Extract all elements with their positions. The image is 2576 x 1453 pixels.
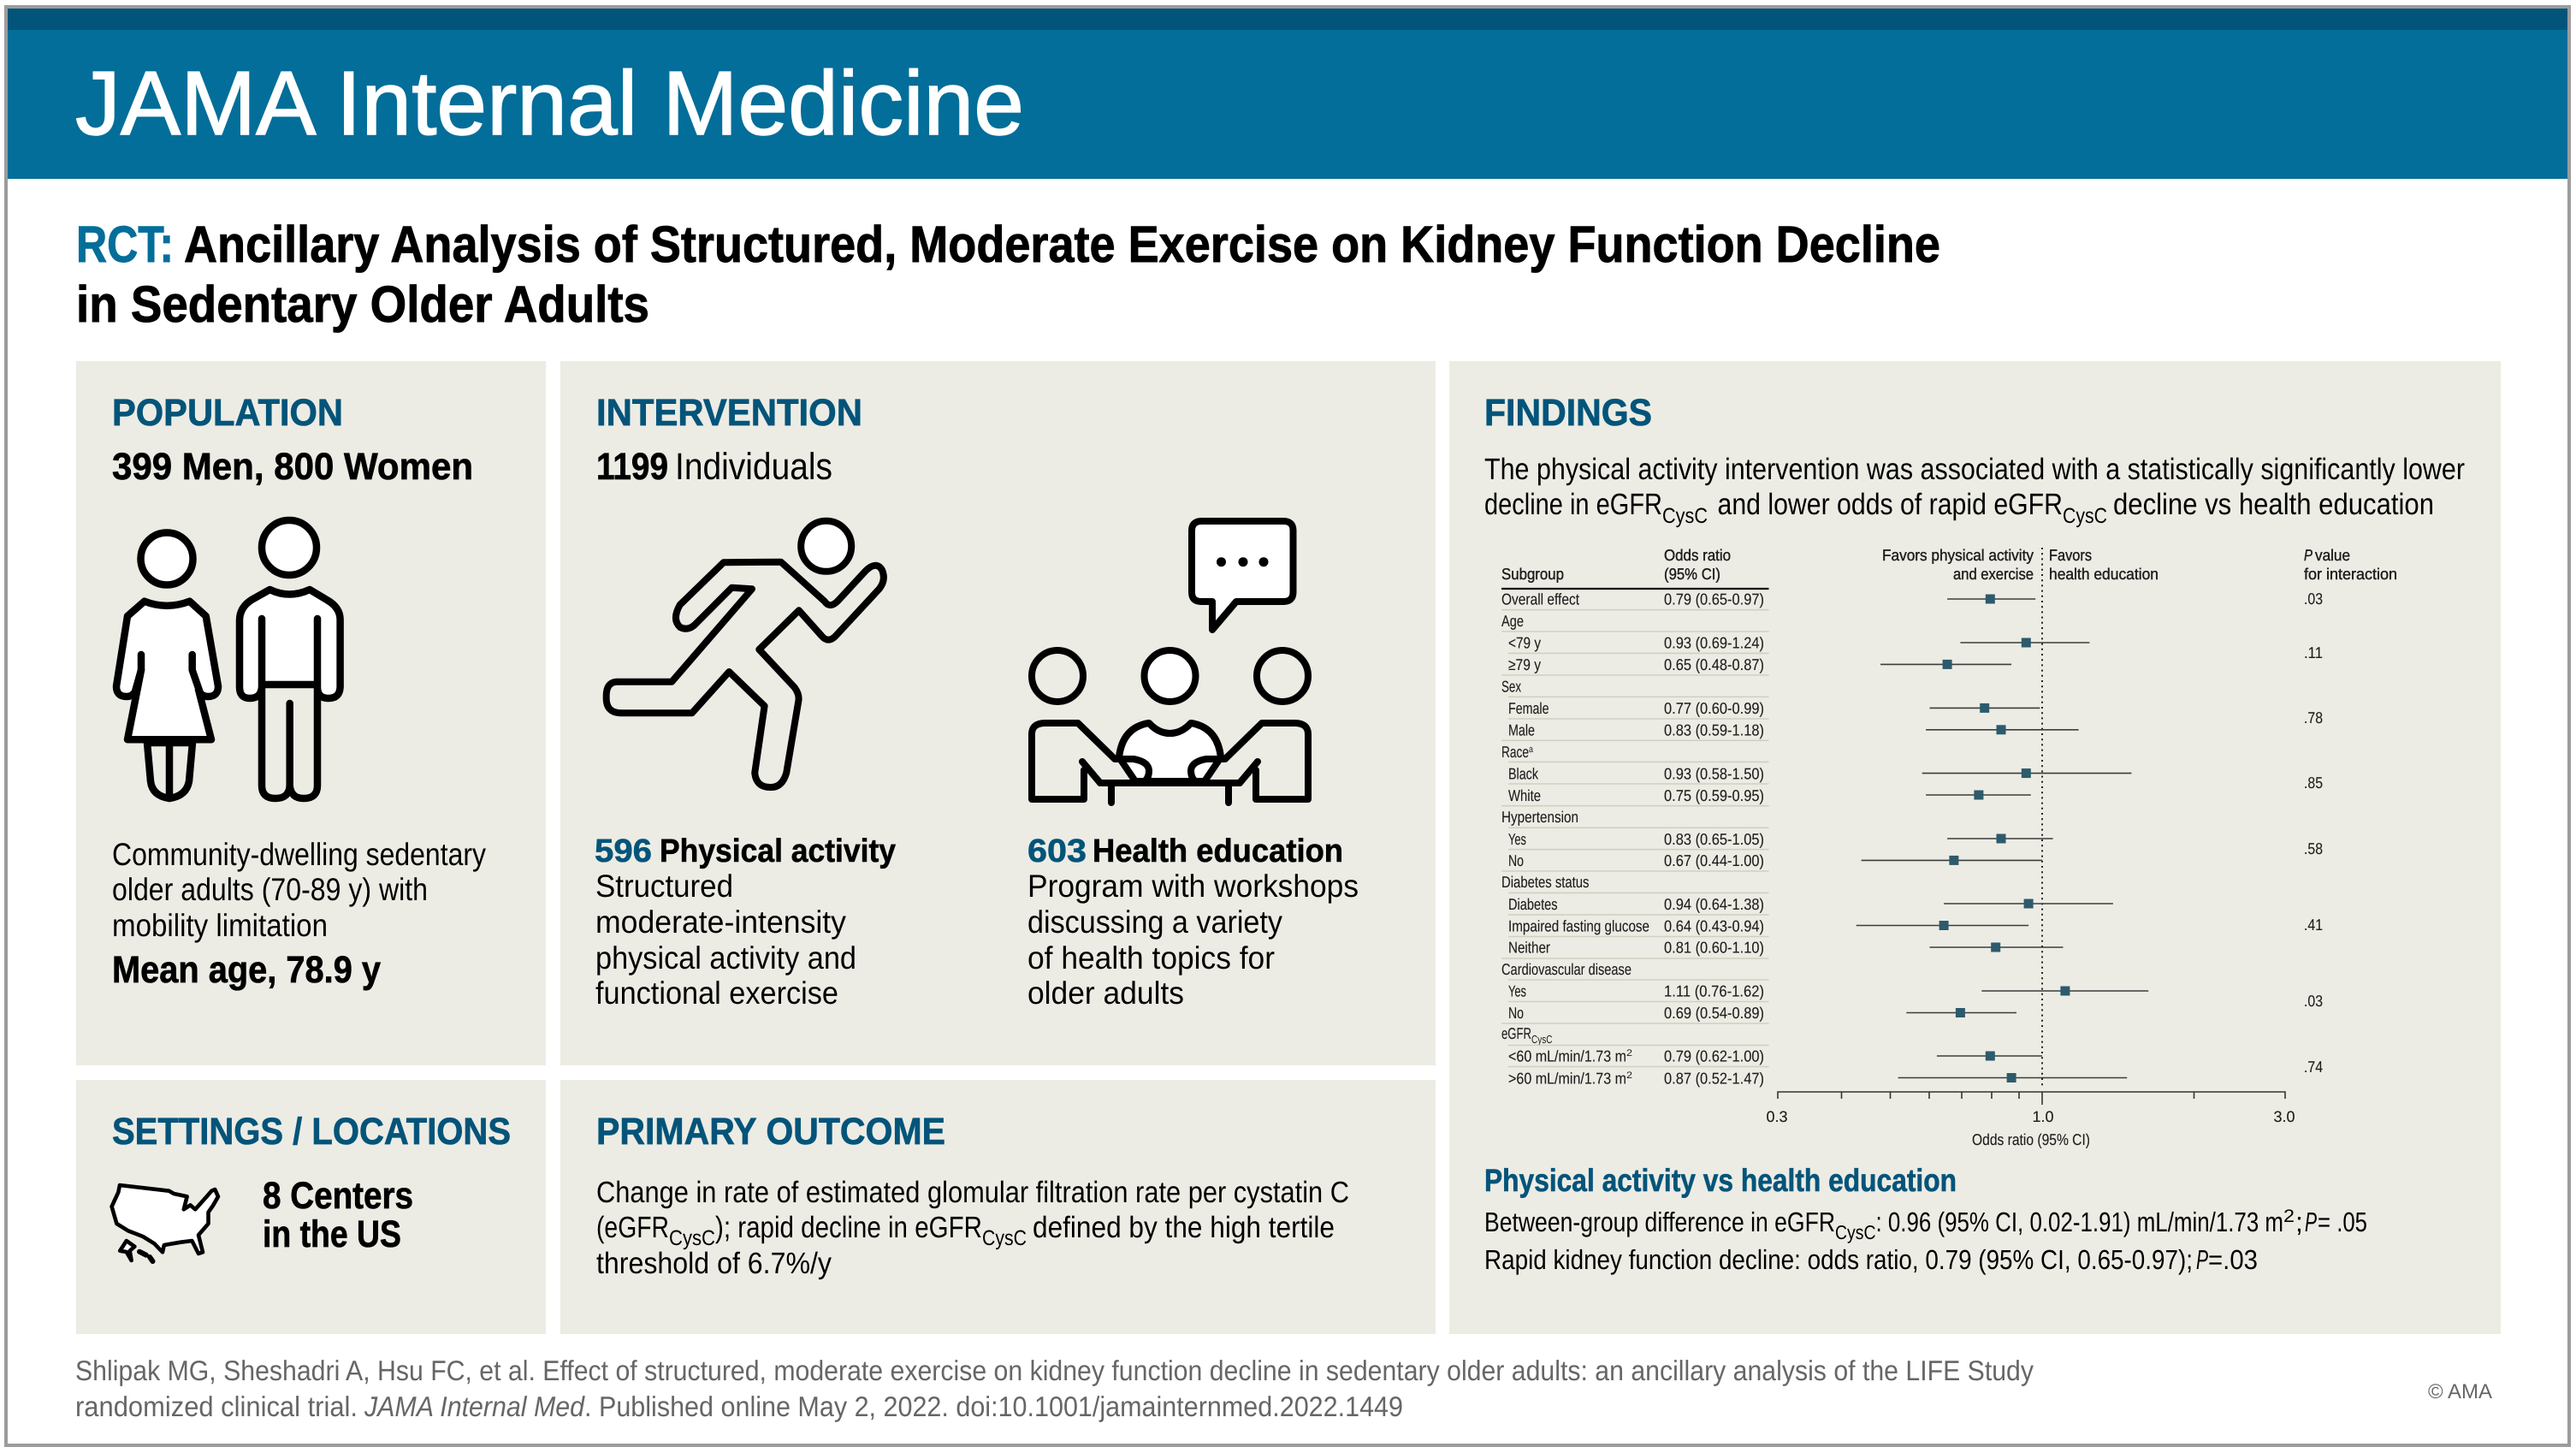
x axis: odds ratio: 0.3: [1766, 1108, 1788, 1125]
population description: older adults (70-89 y) with: [112, 872, 428, 907]
citation: JAMA Internal Med: [364, 1391, 586, 1422]
icon: speech bubble: [1192, 521, 1294, 630]
health education arm: [1027, 833, 1359, 1011]
copyright: © AMA: [2428, 1380, 2492, 1403]
group: age: <79 y: [1508, 633, 1542, 652]
journal title: JAMA Internal Medicine: [75, 53, 1024, 154]
group: diabetes status: 0.94 (0.64-1.38): [1664, 895, 1764, 913]
null reference line: [2041, 548, 2043, 1088]
result: between-group difference: 2: [2283, 1207, 2295, 1226]
forest plot column headers: health education: [2049, 565, 2159, 583]
group: diabetes status: Neither: [1508, 938, 1550, 957]
forest plot column headers: and exercise: [1953, 565, 2034, 583]
result: between-group difference: P: [2305, 1207, 2317, 1237]
icon: woman and man: [116, 520, 341, 798]
total individuals: [596, 446, 832, 488]
heading: intervention: INTERVENTION: [596, 392, 862, 434]
group: cardiovascular disease: [1501, 960, 2148, 1023]
result: between-group difference: [1484, 1207, 2367, 1243]
P values for interaction: .03: [2304, 992, 2323, 1010]
group: sex: [1501, 678, 2079, 740]
group: hypertension: [1501, 808, 2053, 871]
physical activity arm: Structured: [595, 869, 733, 904]
group: baseline eGFR: 2: [1626, 1070, 1632, 1081]
group: cardiovascular disease: 1.11 (0.76-1.62): [1664, 982, 1764, 999]
group: sex: 0.77 (0.60-0.99): [1664, 699, 1764, 717]
header banner: [8, 9, 2567, 179]
icon: group discussion at table: [1032, 650, 1308, 803]
findings summary: and lower odds of rapid eGFR: [1718, 488, 2063, 521]
x axis: odds ratio: Odds ratio (95% CI): [1972, 1130, 2090, 1148]
group: sex: Sex: [1501, 678, 1522, 695]
group: cardiovascular disease: Yes: [1508, 982, 1526, 999]
group: diabetes status: [1501, 873, 2113, 958]
citation: [75, 1355, 2034, 1422]
group: cardiovascular disease: 0.69 (0.54-0.89): [1664, 1004, 1764, 1022]
heading: settings: SETTINGS / LOCATIONS: [112, 1111, 511, 1153]
outcome description: [596, 1176, 1349, 1280]
total individuals: 1199: [596, 446, 668, 488]
panel: settings and locations: [76, 1080, 546, 1334]
group: diabetes status: 0.81 (0.60-1.10): [1664, 938, 1764, 957]
panel: intervention: [560, 361, 1436, 1065]
forest plot column headers: (95% CI): [1664, 565, 1720, 583]
health education arm: of health topics for: [1027, 940, 1275, 976]
forest plot column headers: [1501, 546, 2397, 589]
group: age: 0.65 (0.48-0.87): [1664, 655, 1764, 673]
centers count: 8 Centers: [263, 1175, 413, 1217]
group: sex: 0.83 (0.59-1.18): [1664, 721, 1764, 739]
physical activity arm: 596: [595, 833, 652, 869]
total individuals: Individuals: [675, 446, 832, 488]
outcome description: CysC: [669, 1226, 715, 1250]
group: hypertension: No: [1508, 851, 1524, 869]
forest plot column headers: Favors: [2049, 546, 2092, 564]
citation: randomized clinical trial.: [75, 1391, 358, 1422]
row: overall effect: [1501, 590, 2035, 610]
P values for interaction: .03: [2304, 590, 2323, 608]
result: rapid kidney function decline: Rapid kidney function decline: odds ratio, 0.79 (95% CI, 0.65-0.97);: [1484, 1244, 2193, 1275]
forest plot column headers: for interaction: [2304, 565, 2397, 583]
headline: [76, 216, 1940, 333]
health education arm: 603: [1027, 833, 1087, 869]
subheading: physical activity vs health education: Physical activity vs health education: [1484, 1163, 1957, 1198]
result: between-group difference: : 0.96 (95% CI, 0.02-1.91) mL/min/1.73 m: [1875, 1207, 2283, 1237]
findings summary: CysC: [1662, 504, 1708, 528]
headline: in Sedentary Older Adults: [76, 276, 649, 333]
mean age: Mean age, 78.9 y: [112, 949, 381, 991]
population description: mobility limitation: [112, 908, 328, 943]
group: hypertension: 0.83 (0.65-1.05): [1664, 830, 1764, 848]
group: diabetes status: Diabetes status: [1501, 873, 1590, 891]
group: baseline eGFR: [1501, 1024, 2127, 1087]
heading: primary outcome: PRIMARY OUTCOME: [596, 1111, 945, 1153]
physical activity arm: [595, 833, 896, 1011]
forest plot column headers: P: [2304, 546, 2313, 564]
forest plot column headers: value: [2315, 546, 2350, 564]
outcome description: defined by the high tertile: [1033, 1211, 1335, 1244]
health education arm: discussing a variety: [1027, 904, 1282, 940]
findings summary: decline in eGFR: [1484, 488, 1662, 521]
group: baseline eGFR: CysC: [1531, 1033, 1552, 1046]
population counts: 399 Men, 800 Women: [112, 446, 473, 488]
group: age: [1501, 612, 2089, 675]
group: cardiovascular disease: Cardiovascular disease: [1501, 960, 1631, 978]
P values for interaction: .78: [2304, 709, 2323, 726]
group: race: 0.93 (0.58-1.50): [1664, 765, 1764, 782]
icon: US map: [112, 1185, 218, 1261]
group: sex: Female: [1508, 699, 1549, 717]
result: between-group difference: = .05: [2318, 1207, 2367, 1237]
panel: primary outcome: [560, 1080, 1436, 1334]
headline: Ancillary Analysis of Structured, Moderate Exercise on Kidney Function Decline: [184, 216, 1940, 273]
P values for interaction: .41: [2304, 916, 2323, 934]
group: race: a: [1529, 744, 1534, 755]
population description: [112, 837, 486, 943]
physical activity arm: functional exercise: [595, 976, 838, 1011]
outcome description: threshold of 6.7%/y: [596, 1247, 832, 1280]
P values for interaction: .58: [2304, 839, 2323, 857]
icon: runner: [607, 521, 884, 787]
headline: RCT:: [76, 216, 174, 273]
result: between-group difference: ;: [2295, 1207, 2303, 1237]
group: diabetes status: Diabetes: [1508, 895, 1557, 913]
panel: findings: [1449, 361, 2501, 1334]
outcome description: (eGFR: [596, 1211, 669, 1244]
group: diabetes status: 0.64 (0.43-0.94): [1664, 917, 1764, 934]
citation: . Published online May 2, 2022. doi:10.1001/jamainternmed.2022.1449: [584, 1391, 1403, 1422]
group: cardiovascular disease: No: [1508, 1004, 1524, 1022]
x axis: odds ratio: 1.0: [2032, 1108, 2054, 1125]
result: rapid kidney function decline: P: [2196, 1244, 2208, 1275]
physical activity arm: Physical activity: [660, 833, 896, 869]
forest plot column headers: Favors physical activity: [1882, 546, 2034, 564]
centers count: in the US: [263, 1213, 401, 1255]
physical activity arm: moderate-intensity: [595, 904, 846, 940]
forest plot column headers: Odds ratio: [1664, 546, 1731, 564]
P values for interaction: .11: [2304, 643, 2323, 661]
group: age: ≥79 y: [1508, 655, 1542, 673]
group: baseline eGFR: eGFR: [1501, 1024, 1531, 1042]
forest plot column headers: Subgroup: [1501, 565, 1564, 583]
physical activity arm: physical activity and: [595, 940, 856, 976]
group: hypertension: Yes: [1508, 830, 1526, 848]
group: baseline eGFR: 0.79 (0.62-1.00): [1664, 1047, 1764, 1065]
group: diabetes status: Impaired fasting glucose: [1508, 917, 1649, 934]
group: race: Race: [1501, 743, 1529, 761]
x axis: odds ratio: 3.0: [2273, 1108, 2295, 1125]
group: age: Age: [1501, 612, 1524, 630]
population description: Community-dwelling sedentary: [112, 837, 486, 872]
P values for interaction: .85: [2304, 774, 2323, 792]
group: hypertension: 0.67 (0.44-1.00): [1664, 851, 1764, 869]
row: overall effect: Overall effect: [1501, 590, 1579, 608]
group: baseline eGFR: <60 mL/min/1.73 m: [1508, 1047, 1626, 1065]
outcome description: ); rapid decline in eGFR: [715, 1211, 982, 1244]
findings summary: decline vs health education: [2113, 488, 2434, 521]
findings summary: CysC: [2063, 504, 2107, 528]
heading: findings: FINDINGS: [1484, 392, 1652, 434]
group: hypertension: Hypertension: [1501, 808, 1578, 826]
P values for interaction: [2304, 590, 2323, 1076]
result: between-group difference: Between-group difference in eGFR: [1484, 1207, 1835, 1237]
group: race: White: [1508, 786, 1541, 804]
x axis: odds ratio: [1766, 1092, 2295, 1148]
findings summary: [1484, 453, 2465, 528]
health education arm: Program with workshops: [1027, 869, 1359, 904]
forest plot: [1501, 546, 2397, 1148]
heading: population: POPULATION: [112, 392, 343, 434]
citation: Shlipak MG, Sheshadri A, Hsu FC, et al. Effect of structured, moderate exercise on kidney function decline in sedentary older adults: an ancillary analysis of the LIFE Study: [75, 1355, 2034, 1386]
panel: population: [76, 361, 546, 1065]
row: overall effect: 0.79 (0.65-0.97): [1664, 590, 1764, 608]
group: baseline eGFR: 0.87 (0.52-1.47): [1664, 1070, 1764, 1087]
group: age: 0.93 (0.69-1.24): [1664, 633, 1764, 652]
outcome description: CysC: [982, 1226, 1027, 1250]
health education arm: Health education: [1093, 833, 1343, 869]
result: between-group difference: CysC: [1835, 1221, 1875, 1243]
group: sex: Male: [1508, 721, 1535, 739]
group: race: 0.75 (0.59-0.95): [1664, 786, 1764, 804]
outcome description: Change in rate of estimated glomular filtration rate per cystatin C: [596, 1176, 1349, 1209]
group: baseline eGFR: 2: [1626, 1048, 1632, 1059]
P values for interaction: .74: [2304, 1058, 2323, 1076]
result: rapid kidney function decline: =.03: [2208, 1244, 2258, 1275]
group: baseline eGFR: >60 mL/min/1.73 m: [1508, 1070, 1626, 1087]
centers count: [263, 1175, 413, 1255]
group: race: Black: [1508, 765, 1539, 782]
health education arm: older adults: [1027, 976, 1184, 1011]
group: race: [1501, 743, 2131, 806]
